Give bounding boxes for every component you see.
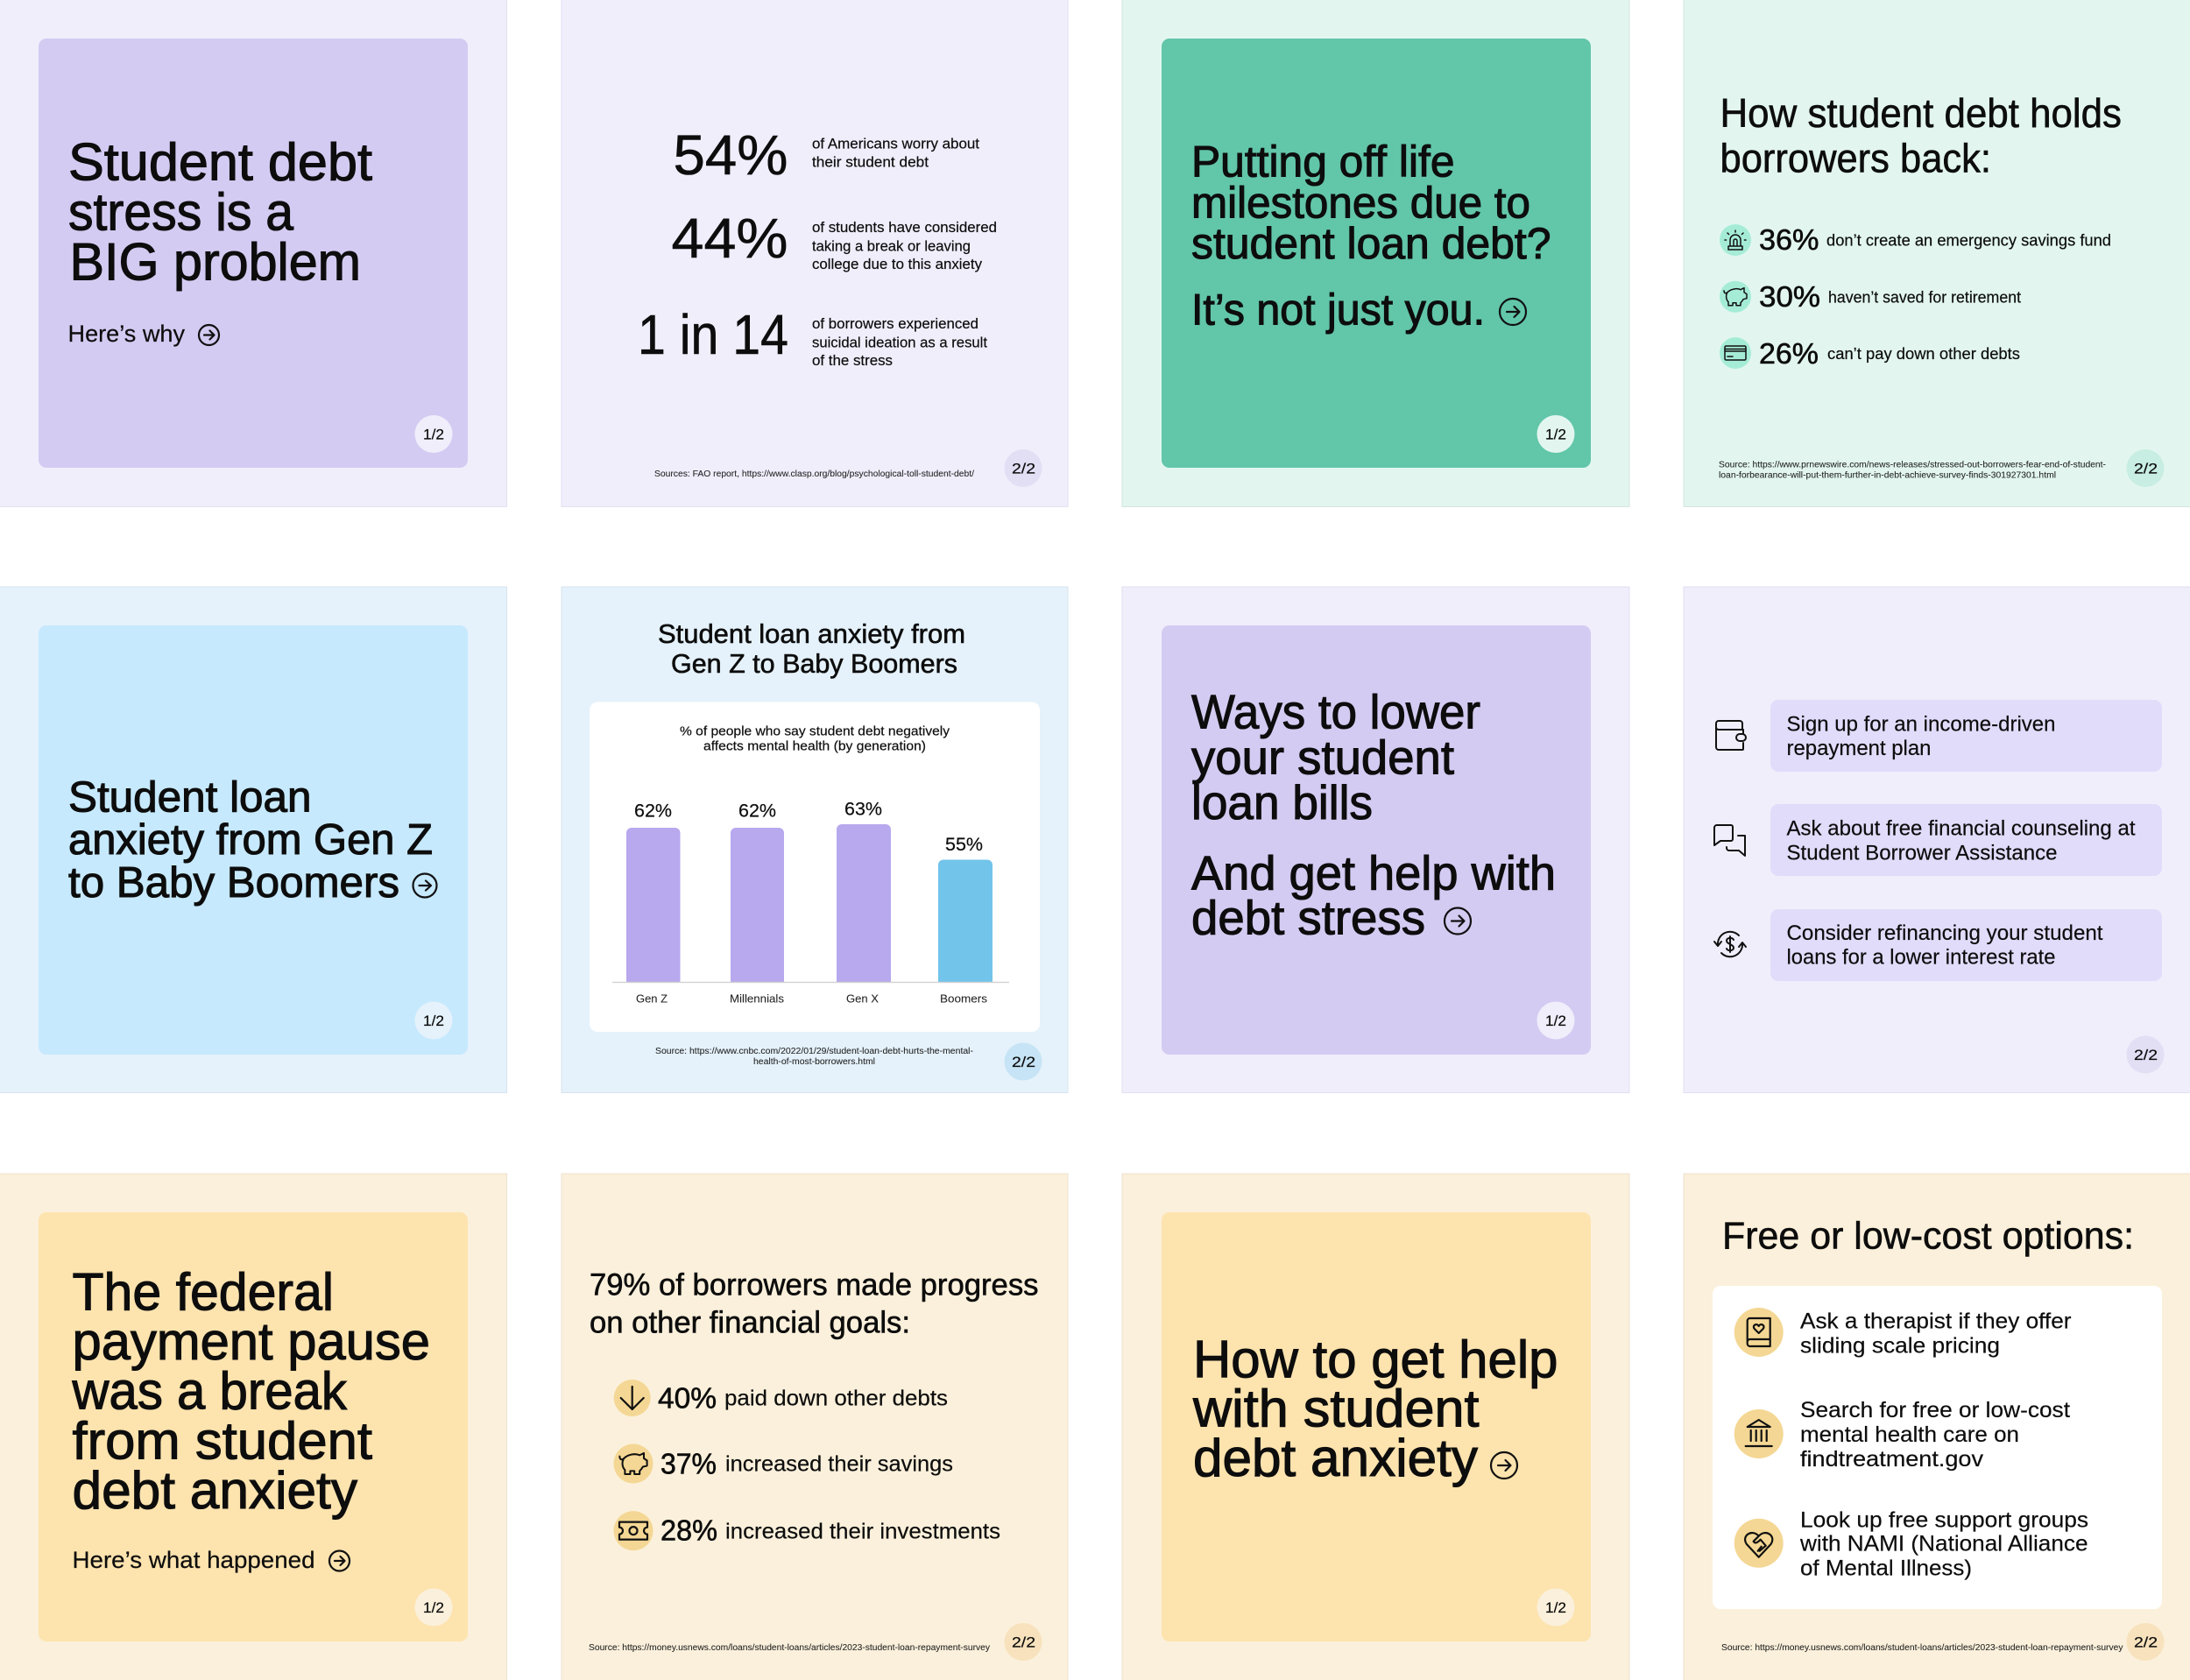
- row: emergency savings: don’t create an emergency savings fund: [1826, 231, 2111, 249]
- row: retirement: haven’t saved for retirement: [1828, 287, 2021, 307]
- heading: was a break: [72, 1361, 348, 1421]
- stat: 54 percent: of Americans worry about: [812, 135, 979, 152]
- row: increased savings: increased their savings: [725, 1452, 953, 1477]
- page badge: [2127, 449, 2164, 487]
- text: here's what happened: Here’s what happened: [72, 1547, 315, 1573]
- heading: on other financial goals:: [590, 1305, 910, 1339]
- heading: [1720, 90, 2122, 180]
- option: income-driven plan: repayment plan: [1787, 737, 1931, 760]
- category labels: [636, 993, 987, 1006]
- stat: 44 percent: of students have considered: [812, 219, 997, 236]
- source note: Source: https://www.cnbc.com/2022/01/29/student-loan-debt-hurts-the-mental-: [655, 1047, 973, 1056]
- row: increased investments: [613, 1511, 1000, 1550]
- heading: student debt stress: [68, 132, 372, 291]
- option: financial counseling: Student Borrower Assistance: [1787, 841, 2057, 865]
- heading: [68, 773, 433, 907]
- heading: [1191, 685, 1556, 944]
- heading: putting off life milestones: [1191, 137, 1551, 334]
- text: here's why: Here’s why: [68, 321, 185, 347]
- stat: 44 percent: college due to this anxiety: [812, 256, 982, 272]
- page badge: 2/2: [1012, 1634, 1035, 1650]
- heading: And get help with: [1191, 846, 1556, 900]
- page badge: 1/2: [1545, 426, 1566, 443]
- option: NAMI support groups: of Mental Illness): [1800, 1556, 1972, 1580]
- heading: [1192, 1330, 1558, 1487]
- stat: 54 percent: their student debt: [812, 154, 929, 170]
- bars: [626, 824, 993, 982]
- page badge: 2/2: [1012, 461, 1035, 476]
- options card: [1713, 1286, 2162, 1609]
- panel: how student debt holds borrowers back: [1684, 0, 2190, 506]
- axis line: [612, 982, 1009, 983]
- category labels: Millennials: [730, 993, 784, 1006]
- heading: Student loan anxiety from: [658, 618, 965, 649]
- panel: how to get help cover: [1122, 1174, 1629, 1680]
- icon: book with heart: [1748, 1318, 1770, 1346]
- panel: gen z to boomers cover: [0, 587, 506, 1093]
- page badge: 2/2: [2134, 1047, 2158, 1063]
- option: NAMI support groups: [1734, 1507, 2088, 1580]
- stat: 54 percent: [673, 124, 979, 187]
- option: NAMI support groups: Look up free support groups: [1800, 1507, 2088, 1532]
- panel: free or low-cost options: [1684, 1174, 2190, 1680]
- panel: generation bar chart: [562, 587, 1068, 1093]
- panel: ways to lower bills cover: [1122, 587, 1629, 1093]
- chart subtitle: affects mental health (by generation): [703, 738, 926, 753]
- option: NAMI support groups: with NAMI (National Alliance: [1799, 1531, 2088, 1556]
- panel: worry statistics: [562, 0, 1068, 506]
- category labels: Gen Z: [636, 993, 668, 1006]
- heading: student debt stress: BIG problem: [70, 232, 361, 291]
- source note: Sources: FAO report, https://www.clasp.org/blog/psychological-toll-student-debt/: [654, 469, 974, 479]
- icon: arrow circle: [1445, 907, 1471, 934]
- stat: 1 in 14: [638, 303, 987, 369]
- page badge: 2/2: [2134, 461, 2158, 476]
- row: paid down debts: 40%: [658, 1382, 717, 1415]
- heading: How to get help: [1193, 1330, 1558, 1389]
- heading: from student: [72, 1412, 372, 1470]
- page badge: [415, 415, 452, 453]
- heading: putting off life milestones: student loan debt?: [1191, 219, 1551, 268]
- source note: [1719, 461, 2106, 481]
- row: emergency savings: [1720, 223, 2111, 256]
- option: refinancing: loans for a lower interest rate: [1787, 946, 2055, 970]
- heading: putting off life milestones: milestones due to: [1191, 178, 1530, 227]
- option: refinancing: [1770, 909, 2162, 981]
- panel: federal payment pause cover: [0, 1174, 506, 1680]
- heading: [590, 1267, 1039, 1339]
- option: therapist: [1734, 1308, 2071, 1358]
- icon: chat bubbles: [1714, 825, 1745, 856]
- icon: arrow circle: [413, 874, 436, 897]
- option: findtreatment: findtreatment.gov: [1800, 1447, 1984, 1472]
- heading: debt anxiety: [72, 1461, 357, 1520]
- row: retirement: [1720, 280, 2021, 313]
- source note: Source: https://www.prnewswire.com/news-releases/stressed-out-borrowers-fear-end-of-student-: [1719, 461, 2106, 469]
- row: increased savings: [613, 1444, 953, 1484]
- row: paid down debts: paid down other debts: [724, 1387, 948, 1411]
- source note: [655, 1047, 973, 1067]
- source note: health-of-most-borrowers.html: [753, 1057, 875, 1067]
- stat: 1 in 14: suicidal ideation as a result: [812, 335, 987, 350]
- option: refinancing: Consider refinancing your student: [1787, 921, 2103, 945]
- icon: credit card: [1725, 346, 1746, 360]
- option: findtreatment: mental health care on: [1800, 1422, 2019, 1447]
- stat: 44 percent: 44%: [671, 207, 788, 270]
- row: other debts: 26%: [1759, 337, 1819, 370]
- option: findtreatment: Search for free or low-cost: [1800, 1398, 2070, 1422]
- heading: to Baby Boomers: [68, 858, 399, 907]
- stat: 54 percent: 54%: [673, 124, 788, 187]
- icon: piggy bank: [619, 1453, 647, 1474]
- icon: arrow circle: [1491, 1452, 1517, 1479]
- source note: Source: https://money.usnews.com/loans/student-loans/articles/2023-student-loan-repayment-survey: [1721, 1643, 2123, 1653]
- chart subtitle: [680, 724, 950, 753]
- category labels: Boomers: [940, 993, 987, 1006]
- source note: loan-forbearance-will-put-them-further-in-debt-achieve-survey-finds-301927301.html: [1719, 471, 2056, 481]
- value labels: [634, 800, 983, 855]
- heading: putting off life milestones: Putting off life: [1191, 137, 1454, 186]
- value labels: 62%: [738, 801, 776, 822]
- stat: 1 in 14: of borrowers experienced: [812, 315, 978, 332]
- page badge: [1537, 415, 1575, 453]
- chart card: [590, 702, 1040, 1032]
- page badge: [1004, 1042, 1042, 1081]
- icon: arrow circle: [1500, 299, 1526, 325]
- heading: your student: [1191, 731, 1454, 785]
- page badge: 1/2: [423, 1013, 444, 1029]
- heading: Free or low-cost options:: [1722, 1215, 2134, 1258]
- icon: arrow circle: [329, 1550, 350, 1571]
- page badge: [2127, 1623, 2164, 1661]
- heading: Ways to lower: [1191, 685, 1480, 738]
- heading: student debt stress: stress is a: [68, 182, 294, 241]
- heading: [658, 618, 965, 679]
- icon: institution: [1746, 1420, 1772, 1446]
- page badge: 1/2: [423, 1599, 444, 1616]
- panel: repayment options: [1684, 587, 2190, 1093]
- option: therapist: sliding scale pricing: [1800, 1333, 2000, 1358]
- row: increased savings: 37%: [661, 1447, 717, 1479]
- stat: 44 percent: taking a break or leaving: [812, 238, 971, 254]
- page badge: [1004, 1623, 1042, 1661]
- category labels: Gen X: [846, 993, 880, 1006]
- option: therapist: Ask a therapist if they offer: [1800, 1309, 2071, 1333]
- row: paid down debts: [614, 1380, 948, 1416]
- heading: Student loan: [68, 773, 312, 822]
- stat: 1 in 14: of the stress: [812, 352, 893, 369]
- panel: student debt stress cover: [0, 0, 506, 506]
- stat: 1 in 14: 1 in 14: [638, 303, 788, 366]
- icon: refinance exchange: [1714, 932, 1746, 956]
- heading: The federal: [72, 1263, 334, 1321]
- icon: wallet: [1716, 721, 1746, 750]
- row: increased investments: 28%: [661, 1514, 717, 1546]
- page badge: [2127, 1035, 2164, 1074]
- heading: borrowers back:: [1720, 135, 1991, 180]
- row: other debts: [1720, 337, 2020, 370]
- option: findtreatment: [1734, 1398, 2070, 1472]
- heading: putting off life milestones: It’s not just you.: [1191, 285, 1485, 334]
- row: retirement: 30%: [1759, 280, 1820, 313]
- source note: Source: https://money.usnews.com/loans/student-loans/articles/2023-student-loan-repayment-survey: [589, 1643, 990, 1653]
- page badge: 1/2: [1545, 1599, 1566, 1616]
- chart subtitle: % of people who say student debt negatively: [680, 724, 950, 738]
- icon: down arrow: [621, 1387, 644, 1409]
- icon: banknote: [619, 1522, 647, 1540]
- value labels: 62%: [634, 801, 672, 822]
- heading: student debt stress: Student debt: [68, 132, 372, 191]
- row: other debts: can’t pay down other debts: [1827, 344, 2020, 363]
- icon: siren: [1725, 230, 1746, 250]
- heading: with student: [1192, 1379, 1480, 1438]
- heading: payment pause: [72, 1312, 430, 1371]
- page badge: 2/2: [1012, 1054, 1035, 1070]
- page badge: [1537, 1002, 1575, 1039]
- value labels: 63%: [844, 800, 882, 820]
- heading: loan bills: [1191, 776, 1373, 829]
- page badge: [415, 1589, 452, 1626]
- heading: anxiety from Gen Z: [68, 815, 433, 864]
- icon: arrow circle: [199, 325, 219, 345]
- row: emergency savings: 36%: [1759, 223, 1819, 256]
- heading: How student debt holds: [1720, 90, 2122, 136]
- heading: debt stress: [1191, 891, 1425, 944]
- heading: [72, 1263, 430, 1520]
- heading: debt anxiety: [1193, 1429, 1478, 1487]
- panel: progress on financial goals: [562, 1174, 1068, 1680]
- value labels: 55%: [945, 835, 983, 855]
- option: income-driven plan: Sign up for an income-driven: [1787, 712, 2055, 736]
- page badge: [415, 1002, 452, 1039]
- page badge: 1/2: [1545, 1013, 1566, 1029]
- option: income-driven plan: [1770, 700, 2162, 772]
- page badge: [1537, 1589, 1575, 1626]
- panel: life milestones cover: [1122, 0, 1629, 506]
- page badge: [1004, 449, 1042, 487]
- row: increased investments: increased their investments: [725, 1519, 1000, 1543]
- icon: piggy bank: [1724, 288, 1747, 306]
- page badge: 1/2: [423, 426, 444, 443]
- icon: heart handshake: [1745, 1533, 1772, 1557]
- option: financial counseling: [1770, 804, 2162, 876]
- heading: Gen Z to Baby Boomers: [671, 648, 957, 679]
- stat: 44 percent: [671, 207, 997, 272]
- page badge: 2/2: [2134, 1634, 2158, 1650]
- heading: 79% of borrowers made progress: [590, 1267, 1039, 1302]
- option: financial counseling: Ask about free financial counseling at: [1787, 817, 2136, 841]
